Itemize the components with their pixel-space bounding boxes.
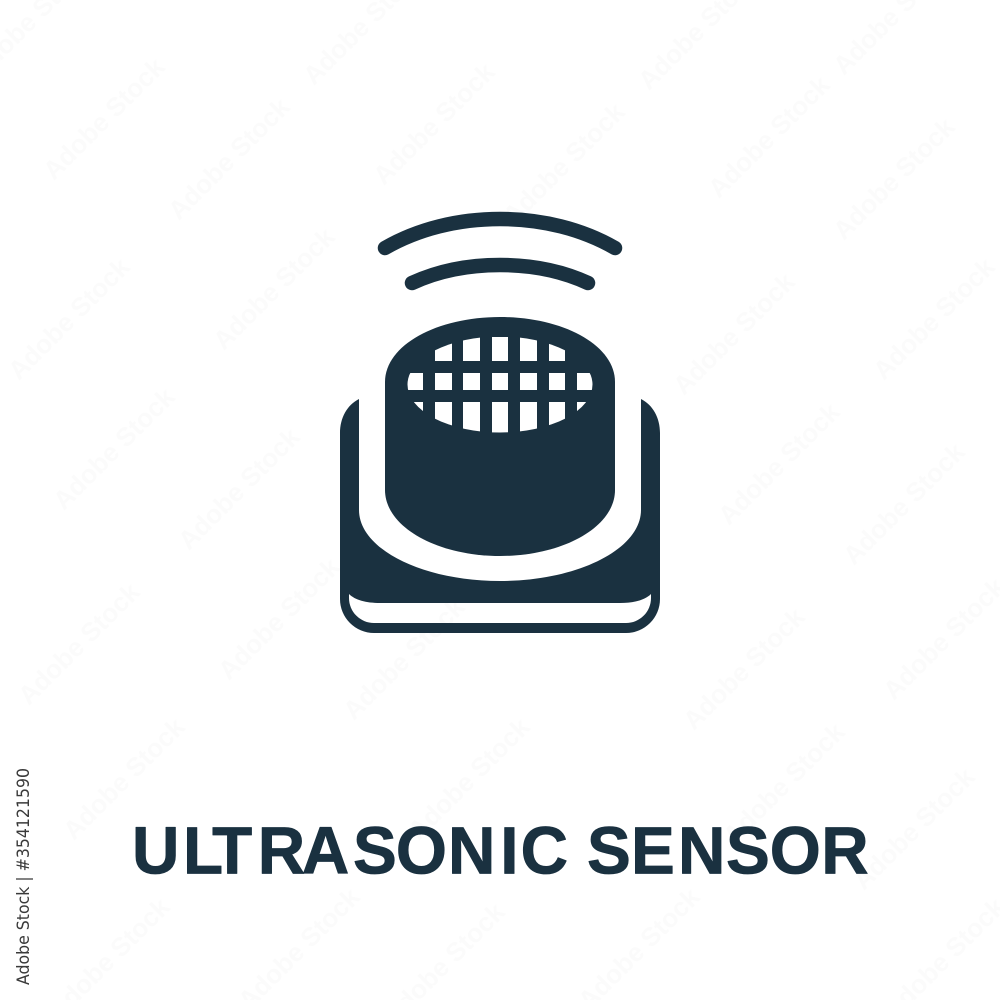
watermark pattern: Adobe Stock bbox=[12, 576, 146, 710]
watermark pattern: Adobe Stock bbox=[837, 436, 971, 570]
watermark pattern: Adobe Stock bbox=[172, 421, 306, 555]
icon: sensor cylinder bbox=[385, 317, 615, 556]
watermark pattern: Adobe Stock bbox=[667, 266, 801, 400]
watermark pattern: Adobe Stock bbox=[212, 551, 346, 685]
watermark pattern: Adobe Stock bbox=[867, 251, 1000, 385]
title: ULTRASONIC SENSOR bbox=[132, 814, 869, 889]
icon: sensor base bbox=[340, 399, 660, 633]
watermark pattern: Adobe Stock bbox=[57, 711, 191, 845]
watermark pattern: Adobe Stock bbox=[402, 711, 536, 845]
watermark pattern: Adobe Stock bbox=[207, 221, 341, 355]
icon: outer signal wave bbox=[385, 219, 615, 248]
watermark pattern: Adobe Stock bbox=[162, 91, 296, 225]
icon: mesh grille bbox=[407, 337, 593, 433]
icon: ultrasonic sensor bbox=[340, 219, 660, 633]
watermark pattern: Adobe Stock bbox=[847, 761, 981, 895]
stock id label: Adobe Stock | #354121590 bbox=[14, 768, 34, 985]
watermark pattern: Adobe Stock bbox=[367, 56, 501, 190]
watermark pattern: Adobe Stock bbox=[702, 69, 836, 203]
watermark pattern: Adobe Stock bbox=[37, 51, 171, 185]
watermark pattern: Adobe Stock bbox=[717, 716, 851, 850]
watermark pattern: Adobe Stock bbox=[337, 591, 471, 725]
watermark pattern: Adobe Stock bbox=[677, 601, 811, 735]
watermark pattern: Adobe Stock bbox=[2, 251, 136, 385]
watermark pattern: Adobe Stock bbox=[47, 381, 181, 515]
watermark pattern: Adobe Stock bbox=[497, 96, 631, 230]
watermark pattern: Adobe Stock bbox=[827, 111, 961, 245]
watermark pattern: Adobe Stock bbox=[712, 396, 846, 530]
icon: inner signal wave bbox=[412, 265, 588, 283]
